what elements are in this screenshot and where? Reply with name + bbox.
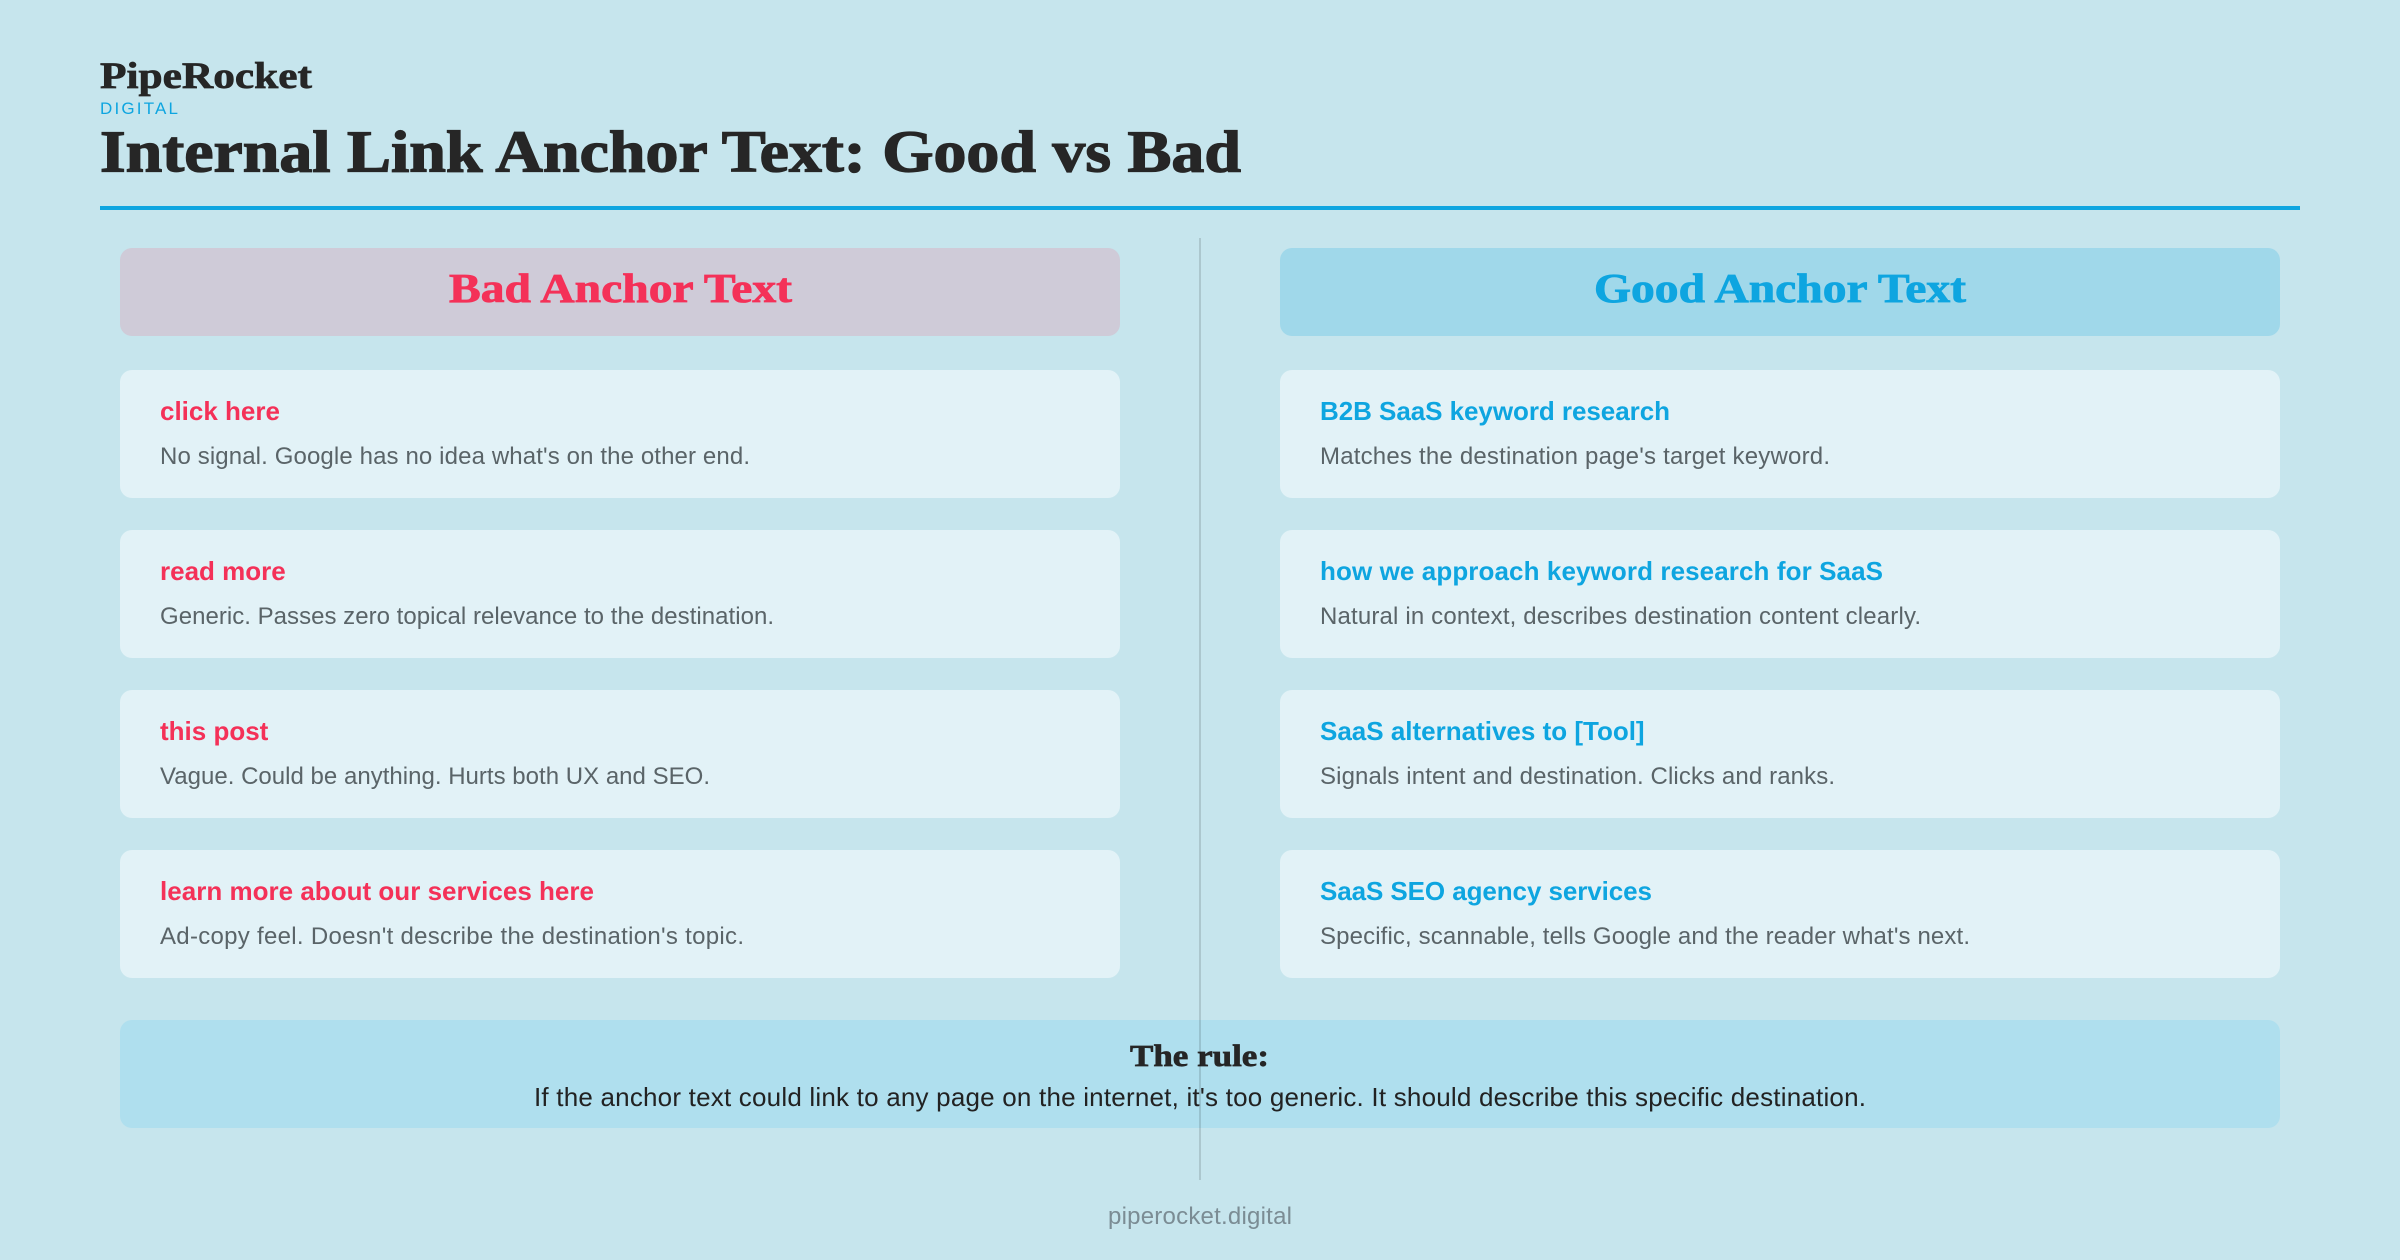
title: Internal Link Anchor Text: Good vs Bad <box>100 118 1241 184</box>
good card: how we approach: Natural in context, describes destination content clearly. <box>1320 603 1921 630</box>
bad card: this post: this post <box>160 716 269 746</box>
bad card: this post: Vague. Could be anything. Hurts both UX and SEO. <box>160 763 710 790</box>
good card: keyword research <box>1280 370 2280 498</box>
good card: agency services <box>1280 850 2280 978</box>
bad card: learn more <box>120 850 1120 978</box>
good card: alternatives: Signals intent and destination. Clicks and ranks. <box>1320 763 1835 790</box>
good card: how we approach <box>1280 530 2280 658</box>
bad card: learn more: learn more about our services here <box>160 876 594 906</box>
brand name: PipeRocket <box>100 56 313 97</box>
good card: alternatives: SaaS alternatives to [Tool] <box>1320 716 1645 746</box>
callout: the rule: If the anchor text could link to any page on the internet, it's too generic. It should describe this specific destination. <box>534 1082 1866 1112</box>
good column heading: Good Anchor Text <box>1594 265 1966 311</box>
header <box>100 56 1241 184</box>
bad card: read more: Generic. Passes zero topical relevance to the destination. <box>160 603 774 630</box>
good card: agency services: SaaS SEO agency services <box>1320 876 1652 906</box>
good card: how we approach: how we approach keyword research for SaaS <box>1320 556 1883 586</box>
good column heading <box>1280 248 2280 336</box>
callout: the rule <box>120 1020 2280 1128</box>
good card: keyword research: Matches the destination page's target keyword. <box>1320 443 1830 470</box>
good card: agency services: Specific, scannable, tells Google and the reader what's next. <box>1320 923 1970 950</box>
footer: piperocket.digital <box>1108 1203 1292 1230</box>
bad card: read more <box>120 530 1120 658</box>
bad card: click here: click here <box>160 396 280 426</box>
bad card: click here: No signal. Google has no idea what's on the other end. <box>160 443 750 470</box>
bad card: click here <box>120 370 1120 498</box>
brand sub-label: DIGITAL <box>100 99 178 118</box>
good card: alternatives <box>1280 690 2280 818</box>
bad column heading <box>120 248 1120 336</box>
callout: the rule: The rule: <box>1130 1038 1269 1073</box>
panel: bad anchor text <box>120 248 1120 978</box>
bad card: read more: read more <box>160 556 286 586</box>
panel: good anchor text <box>1280 248 2280 978</box>
bad card: learn more: Ad-copy feel. Doesn't describe the destination's topic. <box>160 923 744 950</box>
good card: keyword research: B2B SaaS keyword research <box>1320 396 1670 426</box>
bad card: this post <box>120 690 1120 818</box>
bad column heading: Bad Anchor Text <box>449 265 792 311</box>
